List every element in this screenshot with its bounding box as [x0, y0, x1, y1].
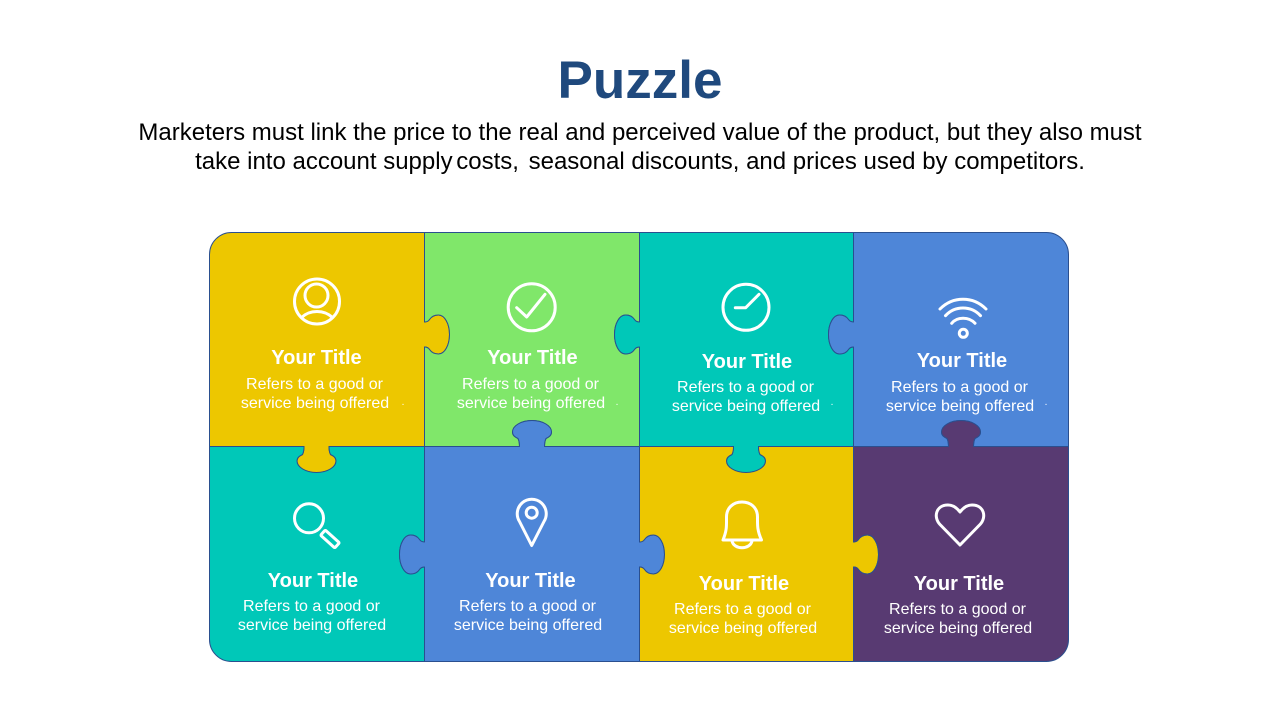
heading: piece 1: Your Title: [271, 347, 362, 369]
text: piece 6: service being offered: [454, 617, 602, 634]
heading: piece 3: Your Title: [702, 351, 792, 373]
heading: piece 6: Your Title: [485, 570, 576, 592]
icon: magnifier: [294, 504, 339, 548]
text: piece 5: Refers to a good or: [243, 598, 381, 615]
panel: piece 7 yellow: [640, 446, 878, 662]
text: piece 3: [672, 379, 833, 415]
panel: piece 3 teal: [614, 232, 854, 472]
text: piece 4: service being offered: [886, 398, 1034, 415]
heading: piece 4: Your Title: [917, 350, 1007, 372]
heading: piece 7: Your Title: [699, 573, 789, 595]
text: piece 7: service being offered: [669, 620, 817, 637]
panel: piece 2 green: [424, 232, 640, 446]
panel: piece 4 blue: [828, 232, 1068, 446]
panel: piece 6 blue: [400, 420, 664, 662]
text: piece 8: service being offered: [884, 620, 1032, 637]
text: piece 6: Refers to a good or: [459, 598, 597, 615]
panel: piece 8 purple: [854, 420, 1068, 662]
text: piece 1: service being offered: [241, 395, 389, 412]
text: piece 3: .: [831, 397, 833, 408]
text: piece 4: Refers to a good or: [891, 379, 1029, 396]
heading: piece 2: Your Title: [487, 347, 578, 369]
text: piece 2: [457, 376, 618, 412]
heading: piece 5: Your Title: [268, 570, 358, 592]
title: Puzzle: [558, 51, 722, 110]
text: piece 6: [454, 598, 602, 634]
text: piece 5: service being offered: [238, 617, 386, 634]
icon: user: [294, 279, 340, 324]
puzzle grid: [210, 232, 1068, 662]
text: piece 4: [886, 379, 1047, 415]
text: piece 4: .: [1045, 397, 1047, 408]
icon: wifi: [940, 299, 986, 337]
heading: piece 8: Your Title: [914, 573, 1004, 595]
icon: map pin: [517, 499, 546, 546]
text: piece 2: .: [616, 397, 618, 408]
text: piece 2: Refers to a good or: [462, 376, 600, 393]
text: piece 3: service being offered: [672, 398, 820, 415]
text: piece 8: Refers to a good or: [889, 601, 1027, 618]
text: piece 1: [241, 376, 404, 412]
text: piece 1: .: [402, 397, 404, 408]
panel: piece 5 teal: [210, 446, 424, 662]
subtitle text block: Marketers must link the price to the real and perceived value of the product, but they also must: [138, 119, 1142, 146]
panel: piece 1 yellow: [210, 232, 450, 472]
text: piece 7: [669, 601, 817, 637]
text: piece 8: [884, 601, 1032, 637]
text: piece 1: Refers to a good or: [246, 376, 384, 393]
text: piece 7: Refers to a good or: [674, 601, 812, 618]
text: piece 2: service being offered: [457, 395, 605, 412]
icon: clock: [723, 284, 769, 330]
subtitle text block: take into account supply costs, seasonal discounts, and prices used by competitors.: [195, 148, 1085, 175]
icon: bell: [723, 502, 762, 548]
text: piece 5: [238, 598, 386, 634]
icon: check: [508, 284, 555, 331]
icon: heart: [936, 505, 984, 545]
text: piece 3: Refers to a good or: [677, 379, 815, 396]
subtitle text block: [138, 119, 1142, 175]
